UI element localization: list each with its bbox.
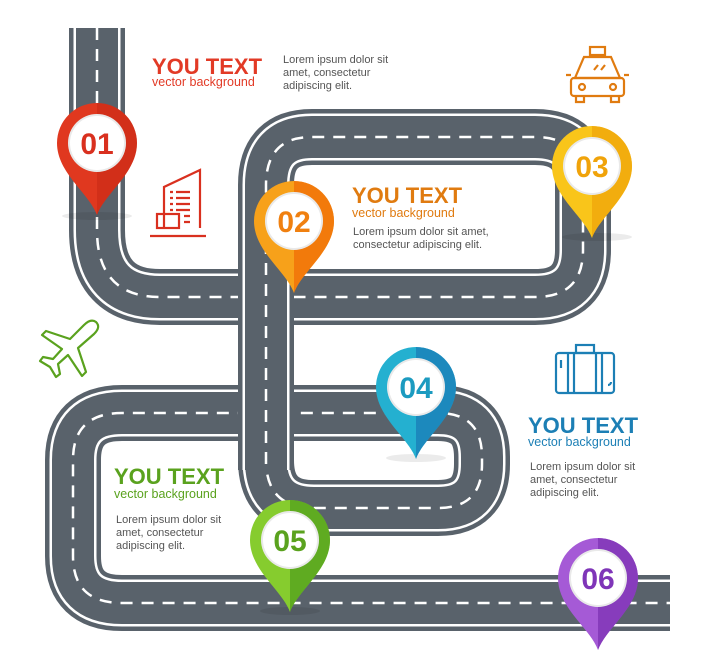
text block 4: vector background: [528, 435, 631, 449]
text block 2: vector background: [352, 206, 455, 220]
text block 4: amet, consectetur: [530, 474, 618, 486]
pin 02: 02: [277, 206, 311, 239]
text block 2: consectetur adipiscing elit.: [353, 239, 482, 251]
pin 06: 06: [581, 563, 615, 596]
text block 1: YOU TEXT: [152, 54, 263, 79]
pin 03: [552, 126, 632, 241]
text block 5: Lorem ipsum dolor sit: [116, 514, 221, 526]
road: [73, 28, 670, 603]
pin 02: [254, 181, 334, 293]
icon: building: [150, 170, 206, 236]
text block 4: [528, 413, 639, 499]
text block 1: vector background: [152, 75, 255, 89]
icon: suitcase: [556, 345, 614, 393]
text block 4: Lorem ipsum dolor sit: [530, 461, 635, 473]
pin 05: [250, 500, 330, 615]
text block 1: amet, consectetur: [283, 67, 371, 79]
pin 06: [558, 538, 638, 650]
icon: plane: [40, 321, 98, 377]
text block 5: amet, consectetur: [116, 527, 204, 539]
text block 4: YOU TEXT: [528, 413, 639, 438]
text block 2: [352, 183, 489, 251]
pin 01: 01: [80, 128, 114, 161]
text block 5: [114, 464, 225, 552]
text block 5: YOU TEXT: [114, 464, 225, 489]
text block 1: [152, 54, 388, 92]
text block 2: Lorem ipsum dolor sit amet,: [353, 226, 489, 238]
text block 2: YOU TEXT: [352, 183, 463, 208]
pin 05: 05: [273, 525, 307, 558]
pin 04: [376, 347, 456, 462]
icon: taxi: [566, 47, 629, 102]
pin 03: 03: [575, 151, 609, 184]
text block 1: adipiscing elit.: [283, 80, 352, 92]
text block 5: vector background: [114, 487, 217, 501]
text block 5: adipiscing elit.: [116, 540, 185, 552]
pin 01: [57, 103, 137, 220]
text block 1: Lorem ipsum dolor sit: [283, 54, 388, 66]
pin 04: 04: [399, 372, 433, 405]
text block 4: adipiscing elit.: [530, 487, 599, 499]
